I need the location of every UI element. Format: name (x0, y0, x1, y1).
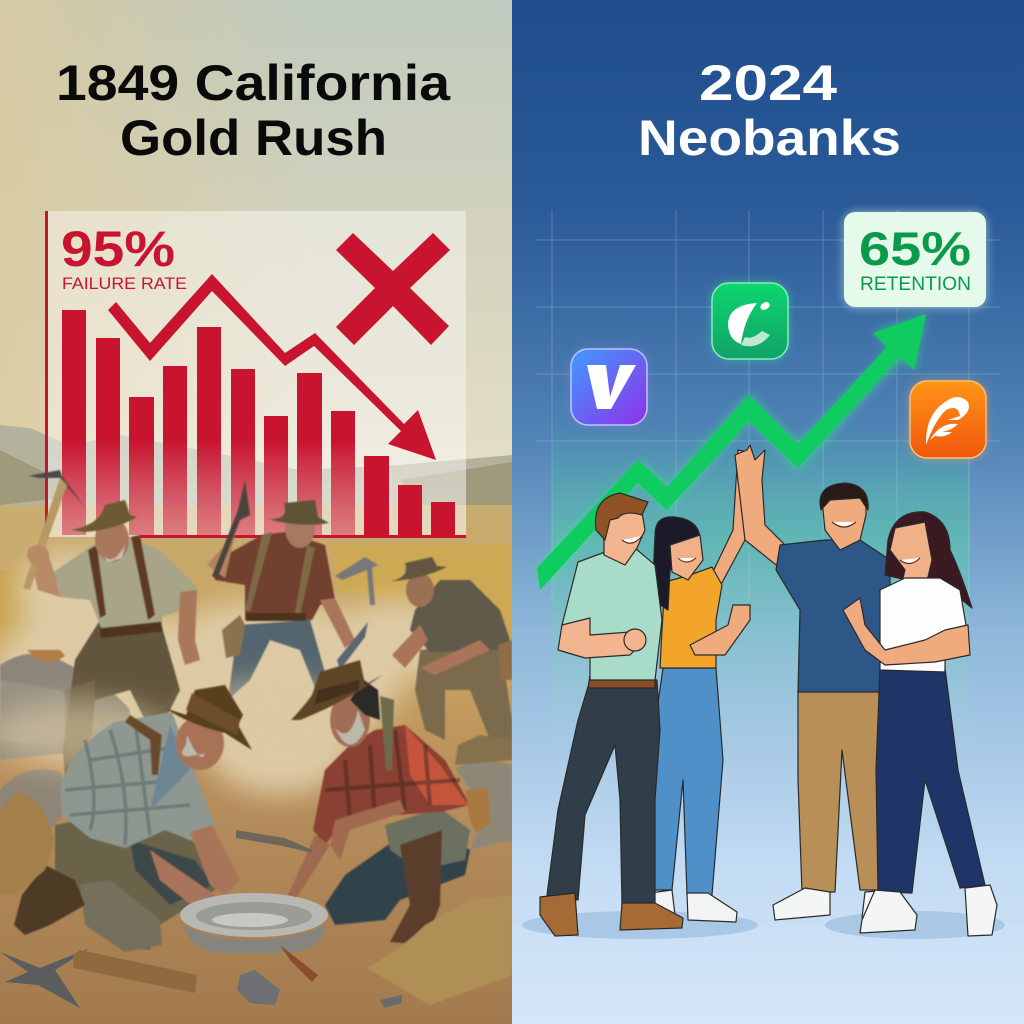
title: neobanks (638, 55, 901, 166)
boulders (0, 650, 512, 850)
figure: woman in orange top (648, 450, 750, 922)
stat card: 65% retention: RETENTION (860, 274, 971, 295)
figure: miner in plaid shirt (207, 480, 378, 700)
title: neobanks: 2024 (699, 55, 837, 111)
bar chart (62, 310, 455, 535)
large sack right (367, 895, 512, 1005)
figure: miner far right (390, 557, 512, 765)
sack left (0, 790, 55, 895)
stat: 95% failure rate: 95% (61, 221, 175, 277)
stat: 95% failure rate (63, 231, 186, 289)
falling trend arrow (108, 274, 436, 460)
rock and scraps (237, 945, 402, 1008)
title: gold rush: Gold Rush (120, 110, 387, 166)
figure: kneeling miner with red flannel (285, 660, 490, 945)
icon: C app (712, 283, 788, 359)
chart panel: failure rate (45, 211, 466, 538)
icon: red X (336, 233, 450, 345)
tool on ground (236, 830, 312, 853)
title: gold rush (60, 64, 450, 156)
icon: V app (571, 349, 647, 425)
title: neobanks: Neobanks (638, 110, 901, 166)
title: gold rush: 1849 California (56, 55, 451, 111)
dust cloud (0, 550, 475, 795)
dust over legs (0, 680, 360, 770)
gold pan (180, 893, 328, 953)
figure: miner swinging pickaxe (23, 470, 200, 775)
panel: 1849 California Gold Rush (0, 0, 512, 1024)
pickaxe on ground (0, 948, 197, 1008)
figure: kneeling miner with plaid shirt (14, 685, 252, 952)
rising growth arrow (537, 314, 926, 590)
figure: man in mint polo (540, 493, 683, 936)
icon: orange app (910, 381, 986, 458)
stat: 95% failure rate: FAILURE RATE (62, 274, 187, 293)
stat card: 65% retention: 65% (859, 222, 971, 275)
stat card: 65% retention (844, 212, 986, 307)
panel: 2024 Neobanks (512, 0, 1024, 1024)
figure: man in navy polo (735, 445, 890, 920)
figure: woman in white tee (843, 512, 997, 936)
floor shadows (522, 911, 1005, 939)
